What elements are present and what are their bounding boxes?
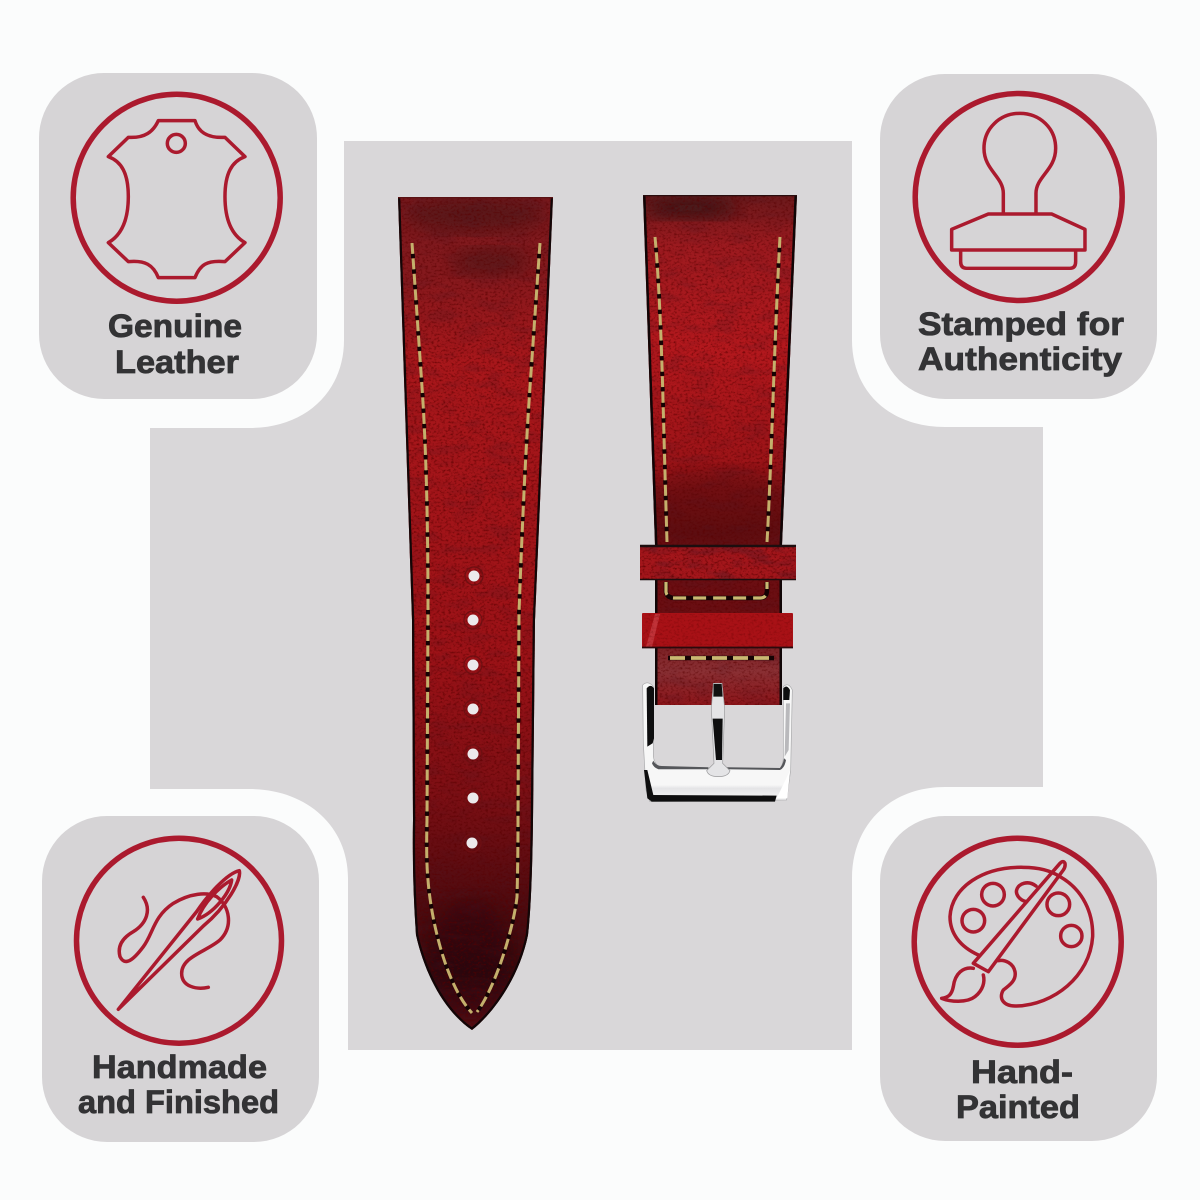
strap keeper upper xyxy=(640,545,796,580)
label: handmade and finished: and Finished xyxy=(78,1084,279,1120)
buckle frame xyxy=(643,683,792,802)
strap keeper lower xyxy=(642,613,793,648)
buckle tongue xyxy=(707,683,730,777)
label: genuine leather: Genuine xyxy=(108,308,242,344)
label: hand-painted: Painted xyxy=(956,1089,1080,1125)
badge: leather hide icon xyxy=(73,94,280,301)
label: stamped for authenticity: Authenticity xyxy=(918,341,1122,377)
strap holes xyxy=(463,567,483,852)
badge: stamp icon xyxy=(915,94,1122,300)
watch strap, buckle piece xyxy=(643,195,797,705)
card: genuine leather xyxy=(39,73,317,399)
buckle dark reflections xyxy=(644,686,790,802)
central grey backdrop xyxy=(150,141,1043,1050)
label: stamped for authenticity: Stamped for xyxy=(918,306,1124,342)
badge: palette and brush icon xyxy=(914,838,1121,1045)
card: handmade and finished xyxy=(42,816,319,1142)
label: hand-painted: Hand- xyxy=(971,1054,1073,1090)
card: stamped for authenticity xyxy=(880,74,1157,399)
label: handmade and finished: Handmade xyxy=(92,1049,267,1085)
watch strap, long piece xyxy=(398,197,553,1030)
card: hand-painted xyxy=(880,816,1157,1141)
metal buckle xyxy=(643,683,792,802)
label: genuine leather: Leather xyxy=(115,344,239,380)
badge: needle and thread icon xyxy=(76,838,282,1043)
